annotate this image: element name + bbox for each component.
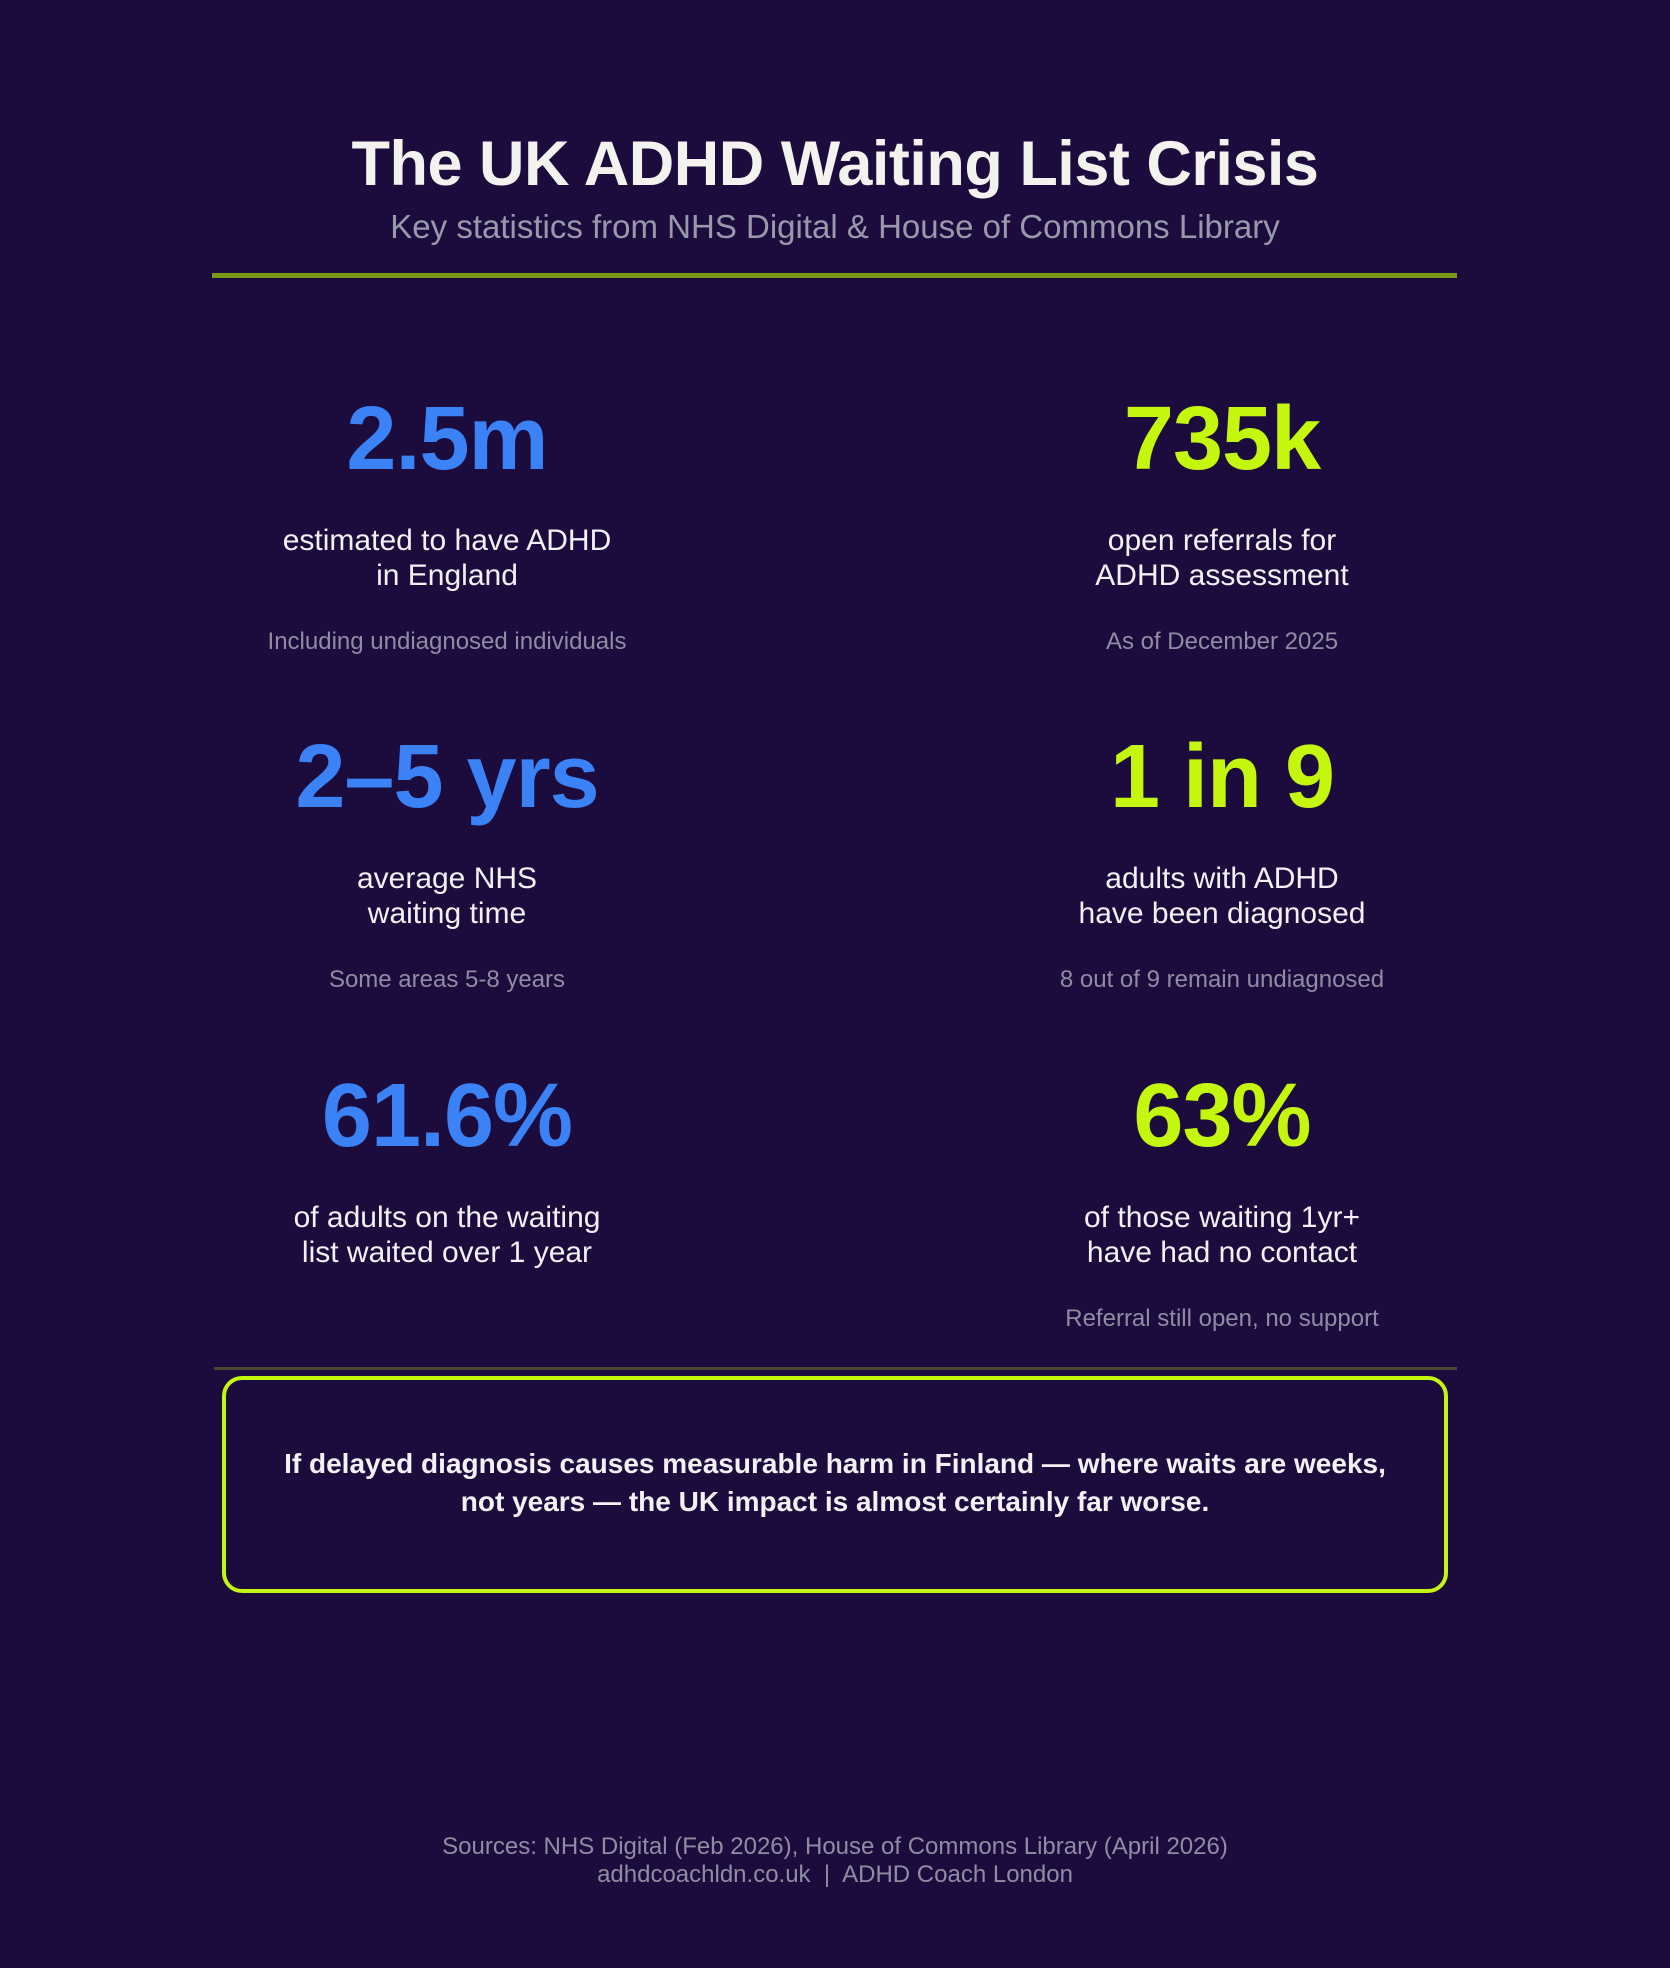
footer sources: Sources: NHS Digital (Feb 2026), House of Commons Library (April 2026) [442,1833,1228,1860]
callout box [222,1376,1448,1593]
footer sources [442,1833,1228,1888]
label [1084,1201,1360,1269]
label: estimated to have ADHD [283,524,611,557]
label: of adults on the waiting [294,1201,600,1234]
note: Referral still open, no support [1065,1305,1379,1332]
label [1079,862,1365,930]
note: Including undiagnosed individuals [268,628,626,655]
stat: 735k [1095,389,1349,655]
label: average NHS [357,862,537,895]
label: waiting time [368,897,526,930]
label: ADHD assessment [1095,559,1349,592]
label: list waited over 1 year [302,1236,592,1269]
callout text [284,1448,1386,1517]
callout text: If delayed diagnosis causes measurable harm in Finland — where waits are weeks, [284,1448,1386,1478]
note: Some areas 5-8 years [329,966,565,993]
label: have been diagnosed [1079,897,1365,930]
footer sources: adhdcoachldn.co.uk | ADHD Coach London [597,1861,1073,1888]
number 2-5 yrs: 2–5 yrs [295,727,599,827]
label [1095,524,1349,592]
number 2.5m: 2.5m [346,389,548,489]
subtitle: Key statistics from NHS Digital & House of Commons Library [390,208,1280,245]
number 1 in 9: 1 in 9 [1110,727,1334,827]
label: in England [376,559,518,592]
label [357,862,537,930]
label [294,1201,600,1269]
label: adults with ADHD [1105,862,1339,895]
stat: 63% [1065,1066,1379,1332]
note: 8 out of 9 remain undiagnosed [1060,966,1384,993]
stat: 1 in 9 [1060,727,1384,993]
label [283,524,611,592]
note: As of December 2025 [1106,628,1338,655]
label: have had no contact [1087,1236,1357,1269]
label: open referrals for [1108,524,1336,557]
number 63%: 63% [1133,1066,1311,1166]
stat: 2-5 yrs [295,727,599,993]
label: of those waiting 1yr+ [1084,1201,1360,1234]
stat: 2.5m [268,389,626,655]
stat: 61.6% [294,1066,600,1269]
callout text: not years — the UK impact is almost certainly far worse. [461,1486,1209,1516]
title: The UK ADHD Waiting List Crisis [352,129,1318,199]
number 735k: 735k [1124,389,1320,489]
number 61.6%: 61.6% [322,1066,572,1166]
